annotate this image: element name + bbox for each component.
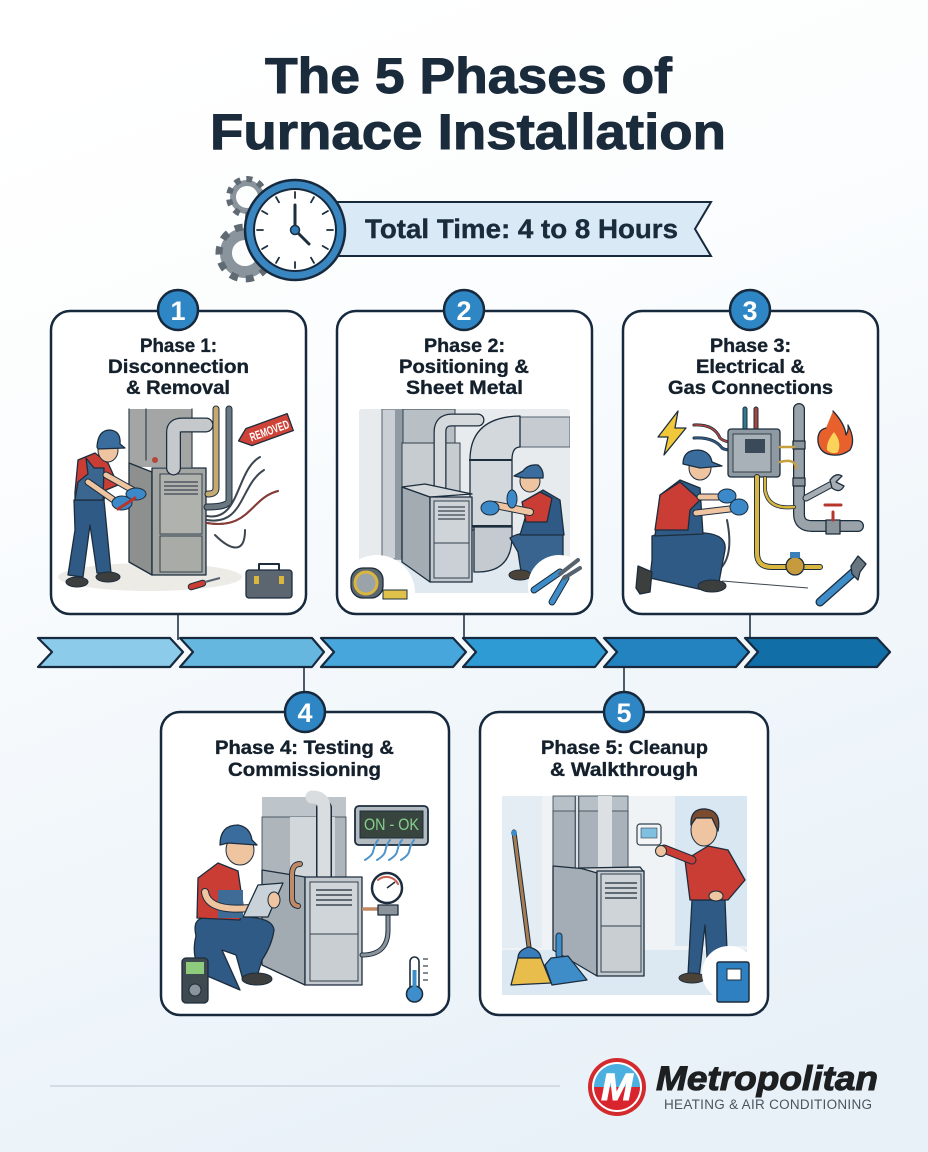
ribbon [335,202,711,256]
icon: lightning [658,411,686,455]
icon: pipe wrench [820,556,866,602]
heading: phase 3: Gas Connections [668,378,833,399]
illustration: disconnecting old furnace [58,409,293,598]
icon: dustpan [545,933,587,985]
panel: phase 5 [480,692,768,1015]
heading: phase 5: Phase 5: Cleanup [541,738,708,759]
heading: phase 2: Phase 2: [424,336,505,357]
connector lines [178,614,750,692]
badge 2 [444,290,484,330]
heading: phase 3 [668,336,833,399]
badge 5 [604,692,644,732]
panel: phase 1 [51,290,306,614]
illustration: electrical and gas connections [636,409,866,602]
illustration: positioning ductwork [350,409,582,606]
icon: broom [511,830,551,985]
panel: phase 4 [161,692,449,1015]
heading: phase 4 [215,738,394,781]
badge 5: 5 [616,698,632,728]
heading: phase 2 [399,336,529,399]
heading: phase 3: Electrical & [696,357,805,378]
icon: multimeter [182,958,208,1003]
heading: phase 4: Commissioning [228,760,381,781]
icon: toolbox [246,564,292,598]
heading: phase 1: Phase 1: [140,336,217,357]
footer rule [50,1085,560,1087]
logo badge [588,1058,646,1116]
logo: Metropolitan [588,1058,878,1116]
title: Furnace Installation [210,104,726,160]
logo wordmark [656,1060,878,1112]
timeline arrows [38,638,890,667]
logo wordmark: Metropolitan [656,1060,878,1098]
icon: thermostat [637,824,661,845]
heading: phase 2: Positioning & [399,357,529,378]
ribbon: Total Time: 4 to 8 Hours [365,214,678,244]
title [210,48,726,160]
display: on ok [355,806,428,845]
icon: clock [245,180,345,280]
badge 3 [730,290,770,330]
title: The 5 Phases of [265,48,672,104]
illustration: testing furnace [182,797,428,1003]
logo badge: M [601,1067,634,1109]
icon: wrench [806,484,832,498]
total time banner [219,179,711,280]
badge 2: 2 [456,296,472,326]
badge 1: 1 [170,296,186,326]
icon: thermometer [406,957,428,1002]
illustration: disconnecting old furnace: REMOVED [248,417,291,444]
logo wordmark: HEATING & AIR CONDITIONING [664,1097,872,1112]
heading: phase 1: Disconnection [108,357,249,378]
icon: warm air [365,840,414,860]
icon: gears [219,179,271,279]
panel: phase 2 [337,290,592,631]
icon: tin snips [534,560,580,602]
heading: phase 1: & Removal [126,378,230,399]
heading: phase 5: & Walkthrough [550,760,698,781]
icon: pressure gauge [372,873,402,915]
illustration: cleanup and walkthrough [502,796,756,1003]
display: on ok: ON - OK [364,815,420,834]
badge 4 [285,692,325,732]
icon: tape measure [351,568,407,599]
icon: flame [818,411,853,455]
heading: phase 3: Phase 3: [710,336,791,357]
badge 1 [158,290,198,330]
heading: phase 1 [108,336,249,399]
badge 4: 4 [297,698,313,728]
icon: manual book [702,946,756,1003]
heading: phase 2: Sheet Metal [406,378,523,399]
heading: phase 5 [541,738,708,781]
badge 3: 3 [742,296,758,326]
panel: phase 3 [623,290,878,614]
heading: phase 4: Phase 4: Testing & [215,738,394,759]
